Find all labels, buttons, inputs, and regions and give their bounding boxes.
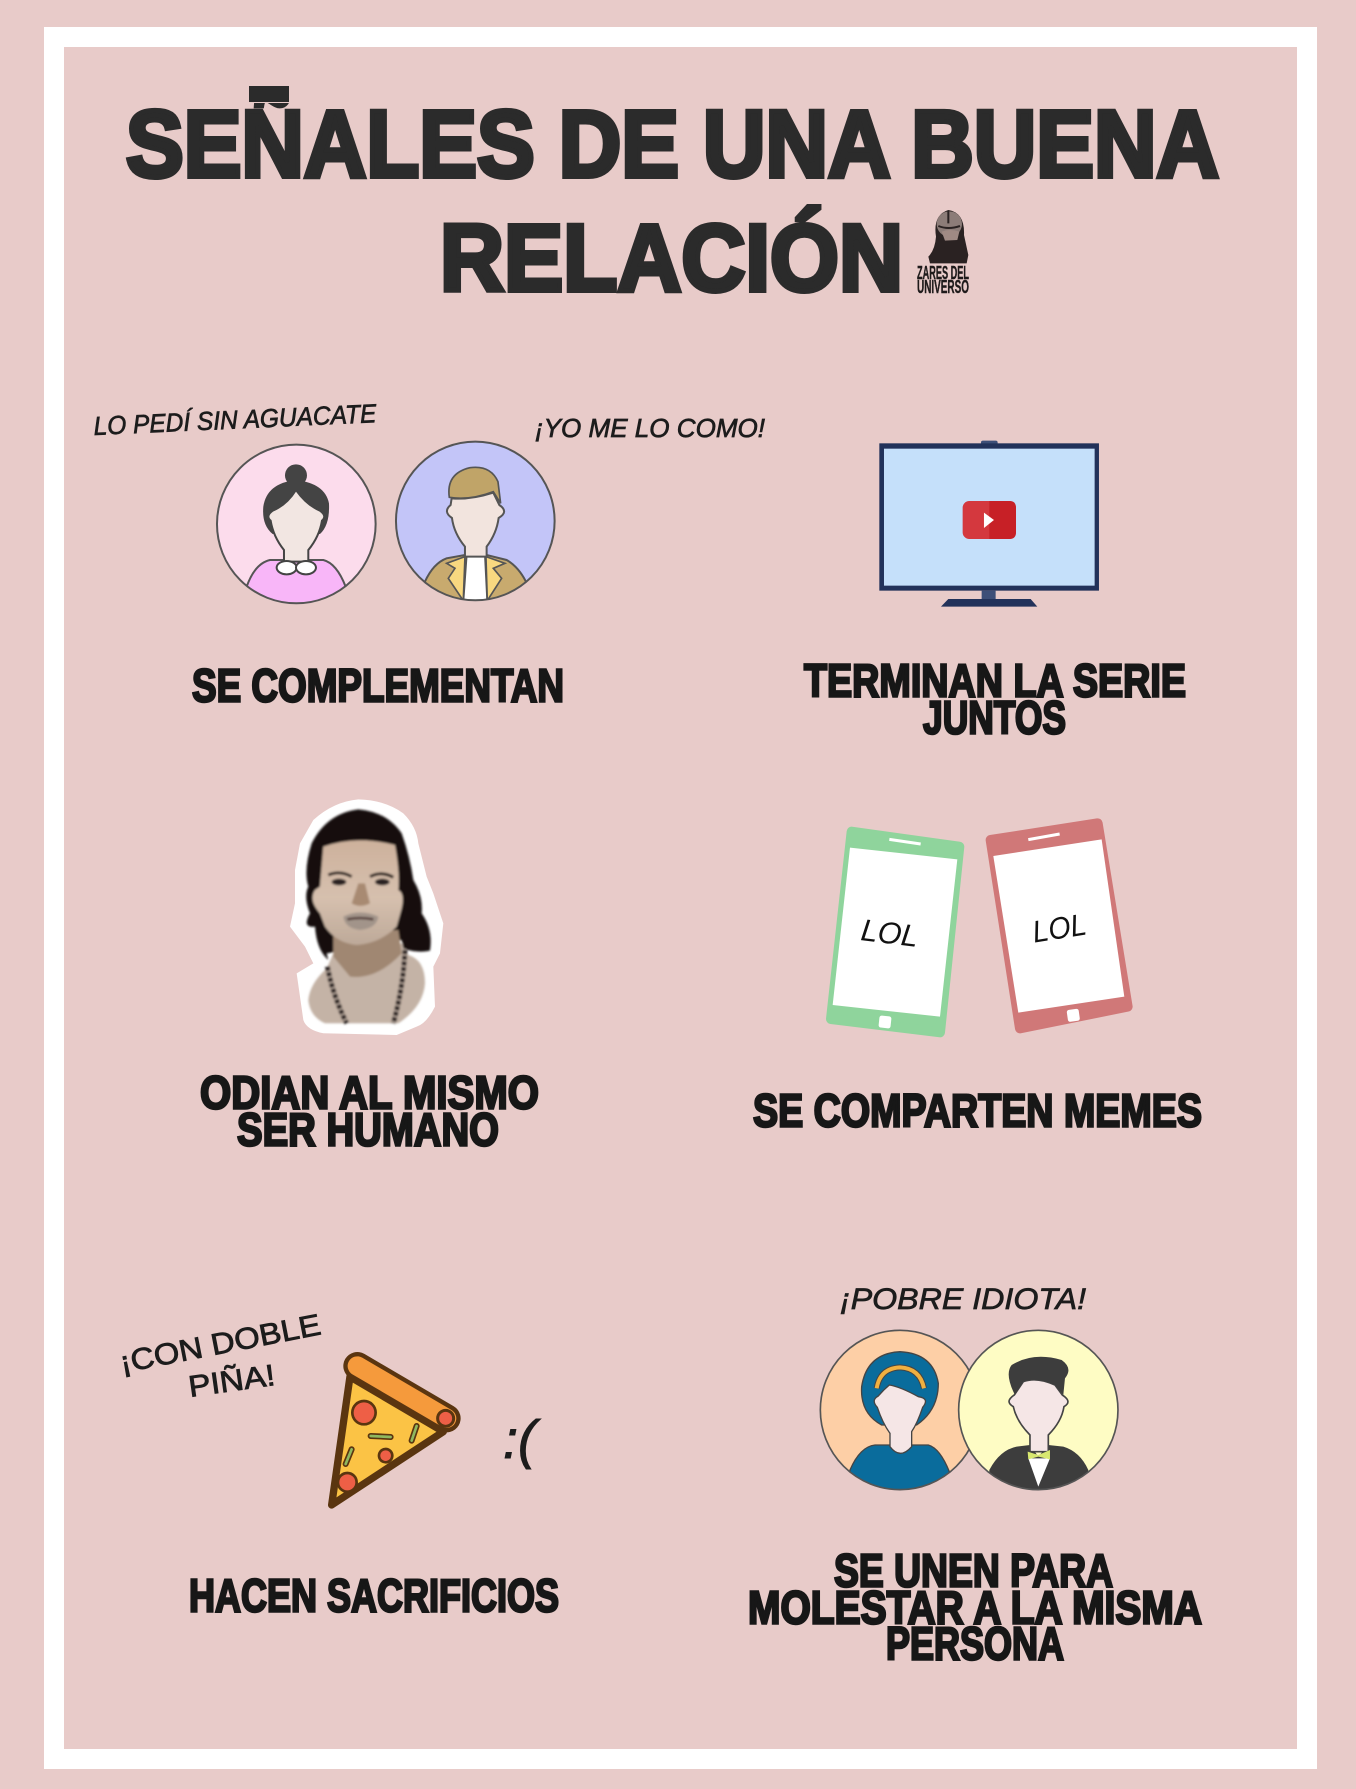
speech: con doble piña: ¡CON DOBLE (117, 1309, 324, 1380)
title: RELACIÓN (440, 206, 903, 312)
heading: odian al mismo ser humano: SER HUMANO (237, 1104, 499, 1156)
heading: se unen para molestar a la misma persona: MOLESTAR A LA MISMA (748, 1582, 1202, 1634)
panel: terminan la serie juntos (804, 441, 1186, 744)
heading: terminan la serie juntos: JUNTOS (923, 692, 1066, 744)
icon: pizza slice (332, 1366, 454, 1505)
icon: man avatar with bow tie (959, 1330, 1118, 1503)
heading: hacen sacrificios: HACEN SACRIFICIOS (189, 1570, 559, 1622)
heading: se unen para molestar a la misma persona: PERSONA (886, 1618, 1064, 1670)
panel: se complementan (93, 398, 765, 712)
logo: Zares del Universo: ZARES DEL (917, 263, 969, 283)
icon: woman avatar (217, 445, 376, 623)
heading: terminan la serie juntos: TERMINAN LA SERIE (804, 654, 1186, 706)
title (126, 76, 1219, 312)
speech: con doble piña: PIÑA! (186, 1358, 277, 1404)
icon: woman avatar with headband (820, 1330, 969, 1490)
speech: con doble piña (117, 1309, 324, 1404)
icon: man avatar (395, 440, 556, 602)
speech: lo pedí sin aguacate: LO PEDÍ SIN AGUACATE (93, 398, 378, 441)
heading: terminan la serie juntos (804, 654, 1186, 744)
icon: red phone (991, 823, 1128, 1028)
icon: red phone: LOL (1030, 908, 1089, 950)
speech: yo me lo como: ¡YO ME LO COMO! (535, 413, 765, 443)
sad face emoticon: :( (503, 1410, 541, 1470)
icon: television with play button (879, 441, 1099, 607)
panel: se comparten memes (753, 823, 1202, 1136)
heading: odian al mismo ser humano (200, 1066, 539, 1156)
icon: portrait sticker (290, 799, 443, 1035)
heading: odian al mismo ser humano: ODIAN AL MISMO (200, 1066, 539, 1118)
heading: se complementan: SE COMPLEMENTAN (192, 660, 564, 712)
heading: se unen para molestar a la misma persona: SE UNEN PARA (834, 1544, 1113, 1596)
heading: se unen para molestar a la misma persona (748, 1544, 1202, 1670)
title: SEÑALES DE UNA BUENA (126, 92, 1219, 198)
icon: green phone: LOL (859, 913, 920, 954)
heading: se comparten memes: SE COMPARTEN MEMES (753, 1084, 1202, 1136)
icon: green phone (831, 832, 959, 1032)
speech: pobre idiota: ¡POBRE IDIOTA! (840, 1283, 1087, 1316)
panel: hacen sacrificios (117, 1309, 559, 1622)
logo: Zares del Universo: UNIVERSO (917, 277, 969, 297)
logo: Zares del Universo (917, 210, 969, 297)
panel: se unen para molestar (748, 1283, 1202, 1670)
panel: odian al mismo ser humano (200, 799, 539, 1156)
